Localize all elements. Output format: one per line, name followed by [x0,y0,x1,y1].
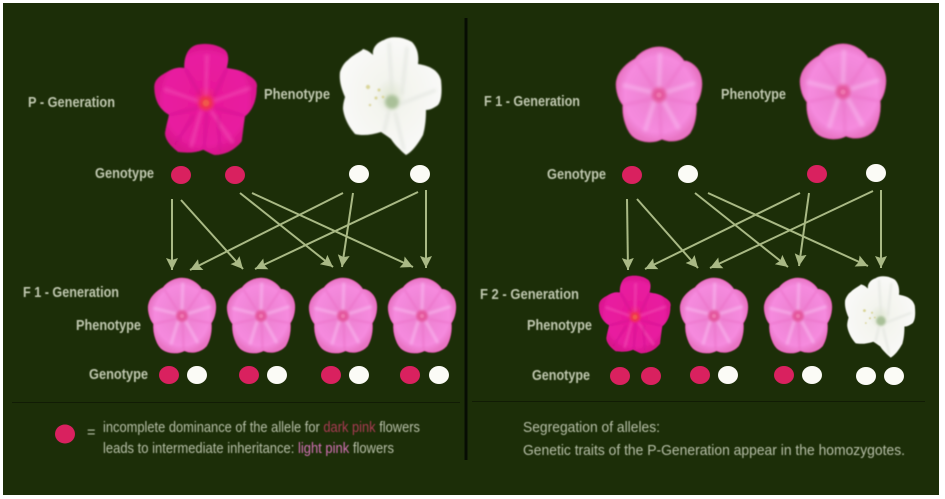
label: phenotype: Phenotype [527,318,592,334]
label: phenotype: Phenotype [264,87,330,103]
F2 alleles [610,366,904,385]
legend: incomplete dominance: incomplete dominance of the allele for dark pink flowers [103,420,420,436]
F2 flowers [599,276,915,358]
panel: F1 generation to F2 generation [472,44,925,459]
flower: light pink F1 right [800,44,886,139]
flower: dark pink parent [154,44,257,155]
F1 light pink flowers [148,278,456,353]
parent alleles [171,165,430,184]
inheritance arrows [627,190,881,270]
legend: incomplete dominance [55,420,420,457]
label: phenotype: Phenotype [76,318,141,334]
F1 parent alleles [622,164,886,184]
label: phenotype: Phenotype [721,87,786,103]
note: segregation of alleles: Genetic traits of the P-Generation appear in the homozygotes. [523,443,905,459]
flower: light pink F1 left [616,47,702,142]
heading: P generation: P - Generation [28,95,115,111]
label: genotype: Genotype [89,367,148,383]
legend: incomplete dominance: = [87,425,95,441]
panel: P generation to F1 generation [12,37,460,457]
heading: F1 generation: F 1 - Generation [23,285,119,301]
inheritance arrows [172,190,426,270]
flower: white parent [340,37,442,155]
legend: incomplete dominance: leads to intermediate inheritance: light pink flowers [103,441,394,457]
note: segregation of alleles [523,420,905,459]
label: genotype: Genotype [95,166,154,182]
note: segregation of alleles: Segregation of alleles: [523,420,660,436]
F1 alleles [159,366,449,384]
label: genotype: Genotype [547,167,606,183]
heading: F2 generation: F 2 - Generation [480,287,579,303]
label: genotype: Genotype [532,368,590,384]
heading: F1 generation: F 1 - Generation [484,94,580,110]
centre divider [464,18,468,460]
